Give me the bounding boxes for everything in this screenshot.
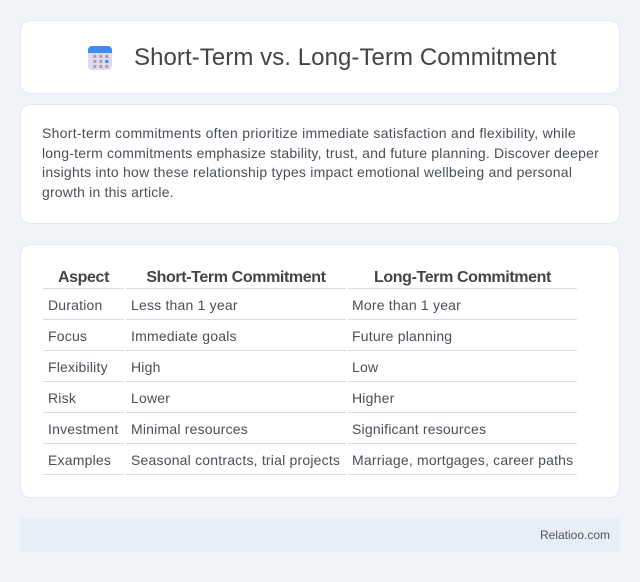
row: Examples: Marriage, mortgages, career paths [352,452,573,468]
row: Flexibility [43,359,577,382]
row: Examples [43,452,577,475]
header row: Long-Term Commitment [374,269,551,286]
footer text: Relatioo.com [540,528,610,542]
panel: title card [20,20,620,94]
panel: introduction [20,104,620,224]
row: Focus: Immediate goals [131,328,237,344]
row: Examples: Examples [48,452,111,468]
row: Duration: More than 1 year [352,297,461,313]
text block: introduction: Short-term commitments often prioritize immediate satisfaction and flexibility, while [42,125,576,141]
panel: comparison table [20,244,620,498]
row: Risk: Lower [131,390,170,406]
footer bar [20,518,620,552]
header row: Aspect [58,269,109,286]
row: Flexibility: Low [352,359,378,375]
comparison table [43,269,577,475]
row: Duration: Less than 1 year [131,297,238,313]
row: Investment [43,421,577,444]
row: Risk: Higher [352,390,394,406]
row: Investment: Significant resources [352,421,486,437]
row: Focus [43,328,577,351]
row: Flexibility: High [131,359,161,375]
header row: Short-Term Commitment [146,269,326,286]
row: Focus: Future planning [352,328,452,344]
row: Investment: Investment [48,421,118,437]
row: Risk [43,390,577,413]
text block: introduction [42,125,599,200]
row: Investment: Minimal resources [131,421,248,437]
text block: introduction: insights into how these relationship types impact emotional wellbeing and personal [42,164,572,180]
row: Duration [43,297,577,320]
row: Risk: Risk [48,390,76,406]
row: Flexibility: Flexibility [48,359,108,375]
row: Duration: Duration [48,297,103,313]
row: Focus: Focus [48,328,87,344]
text block: introduction: long-term commitments emphasize stability, trust, and future planning. Discover deeper [42,145,599,161]
text block: introduction: growth in this article. [42,184,174,200]
row: Examples: Seasonal contracts, trial projects [131,452,340,468]
title: Short-Term vs. Long-Term Commitment [134,44,557,71]
icon: calendar [88,46,112,70]
header row [43,269,577,289]
